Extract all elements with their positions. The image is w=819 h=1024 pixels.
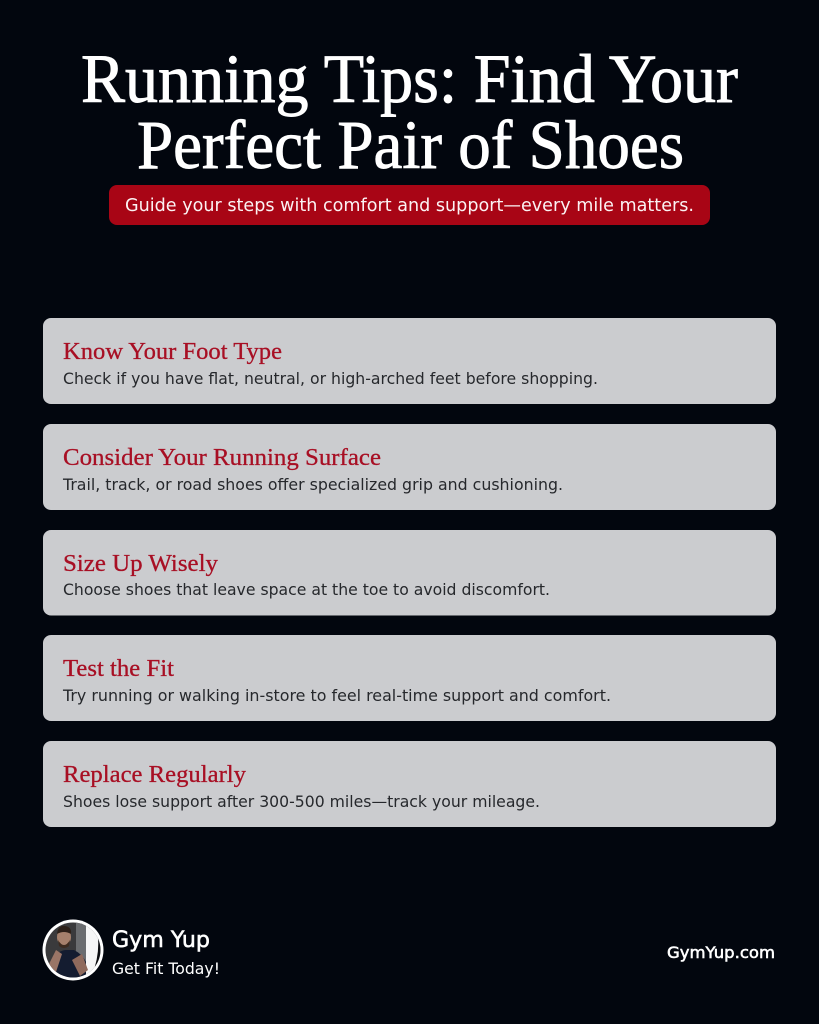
panel: size up wisely xyxy=(43,530,776,616)
icon: avatar portrait xyxy=(42,920,104,980)
text: foot type tip: Check if you have flat, neutral, or high-arched feet before shopping. xyxy=(63,369,598,388)
heading: replace regularly: Replace Regularly xyxy=(63,761,247,788)
heading: know your foot type: Know Your Foot Type xyxy=(63,338,282,365)
panel: know your foot type xyxy=(43,318,776,404)
heading: test the fit: Test the Fit xyxy=(63,655,174,682)
website: GymYup.com xyxy=(667,943,775,962)
title: Running Tips: Find Your xyxy=(81,41,738,117)
heading: size up wisely: Size Up Wisely xyxy=(63,550,219,577)
title: Perfect Pair of Shoes xyxy=(137,107,684,183)
heading: running surface: Consider Your Running Surface xyxy=(63,444,381,471)
text: replace tip: Shoes lose support after 300-500 miles—track your mileage. xyxy=(63,792,540,811)
panel: test the fit xyxy=(43,635,776,721)
panel: running surface xyxy=(43,424,776,510)
subtitle banner: Guide your steps with comfort and support—every mile matters. xyxy=(125,195,694,216)
brand name: Gym Yup xyxy=(112,928,210,953)
text: size tip: Choose shoes that leave space at the toe to avoid discomfort. xyxy=(63,580,550,599)
text: surface tip: Trail, track, or road shoes offer specialized grip and cushioning. xyxy=(62,475,563,494)
brand tagline: Get Fit Today! xyxy=(112,959,220,978)
text: fit tip: Try running or walking in-store to feel real-time support and comfort. xyxy=(62,686,611,705)
title xyxy=(81,41,738,183)
panel: replace regularly xyxy=(43,741,776,827)
subtitle banner xyxy=(109,185,710,225)
